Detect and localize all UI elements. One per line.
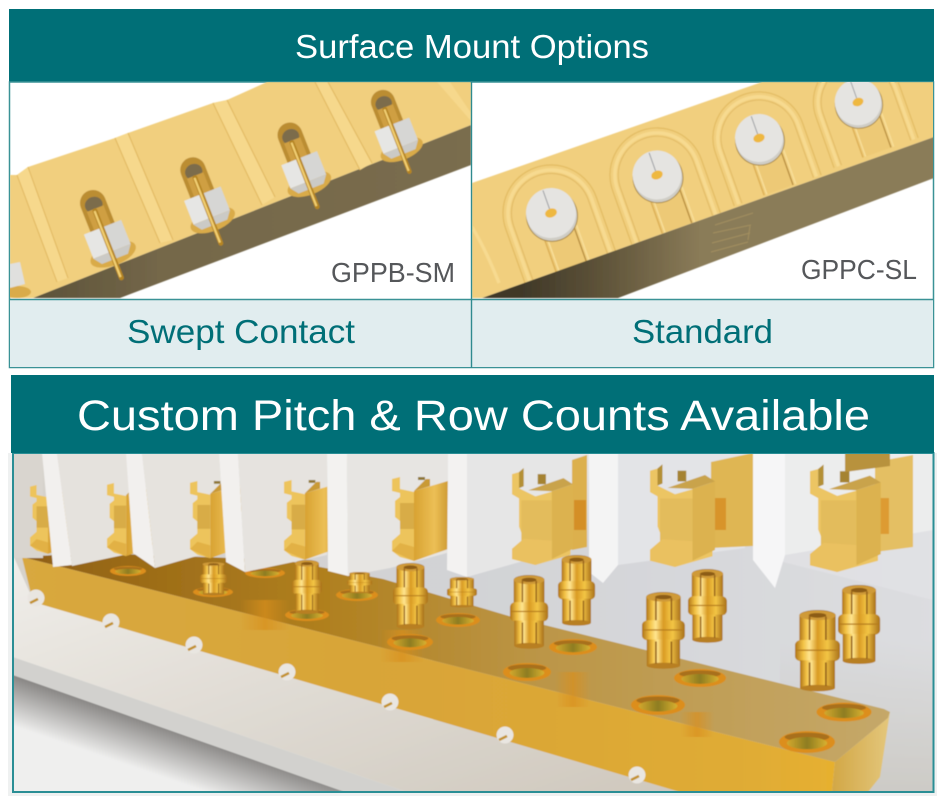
image: standard connector strip <box>472 82 933 299</box>
edge notches with pins <box>28 590 646 784</box>
panel: custom pitch and row counts <box>8 375 937 796</box>
panel: surface mount options <box>3 9 934 368</box>
baseboard <box>13 555 680 792</box>
caption: standard: Standard <box>632 313 773 350</box>
image: exploded connector block render <box>13 453 933 792</box>
heading: surface mount options <box>9 9 934 82</box>
caption row <box>9 82 934 368</box>
gold block <box>22 553 890 792</box>
mounting holes <box>110 566 872 753</box>
caption: swept contact: Swept Contact <box>127 313 355 350</box>
heading: custom pitch and row counts: Custom Pitch & Row Counts Available <box>77 392 870 440</box>
heading: surface mount options: Surface Mount Options <box>295 28 649 65</box>
carriers and surface mount connectors <box>13 453 933 588</box>
gold barrel contacts <box>200 555 880 691</box>
label: GPPB-SM: GPPB-SM <box>331 257 455 288</box>
label: GPPC-SL: GPPC-SL <box>801 254 917 285</box>
image: swept contact connector strip <box>3 82 471 298</box>
heading: custom pitch and row counts <box>11 375 934 453</box>
